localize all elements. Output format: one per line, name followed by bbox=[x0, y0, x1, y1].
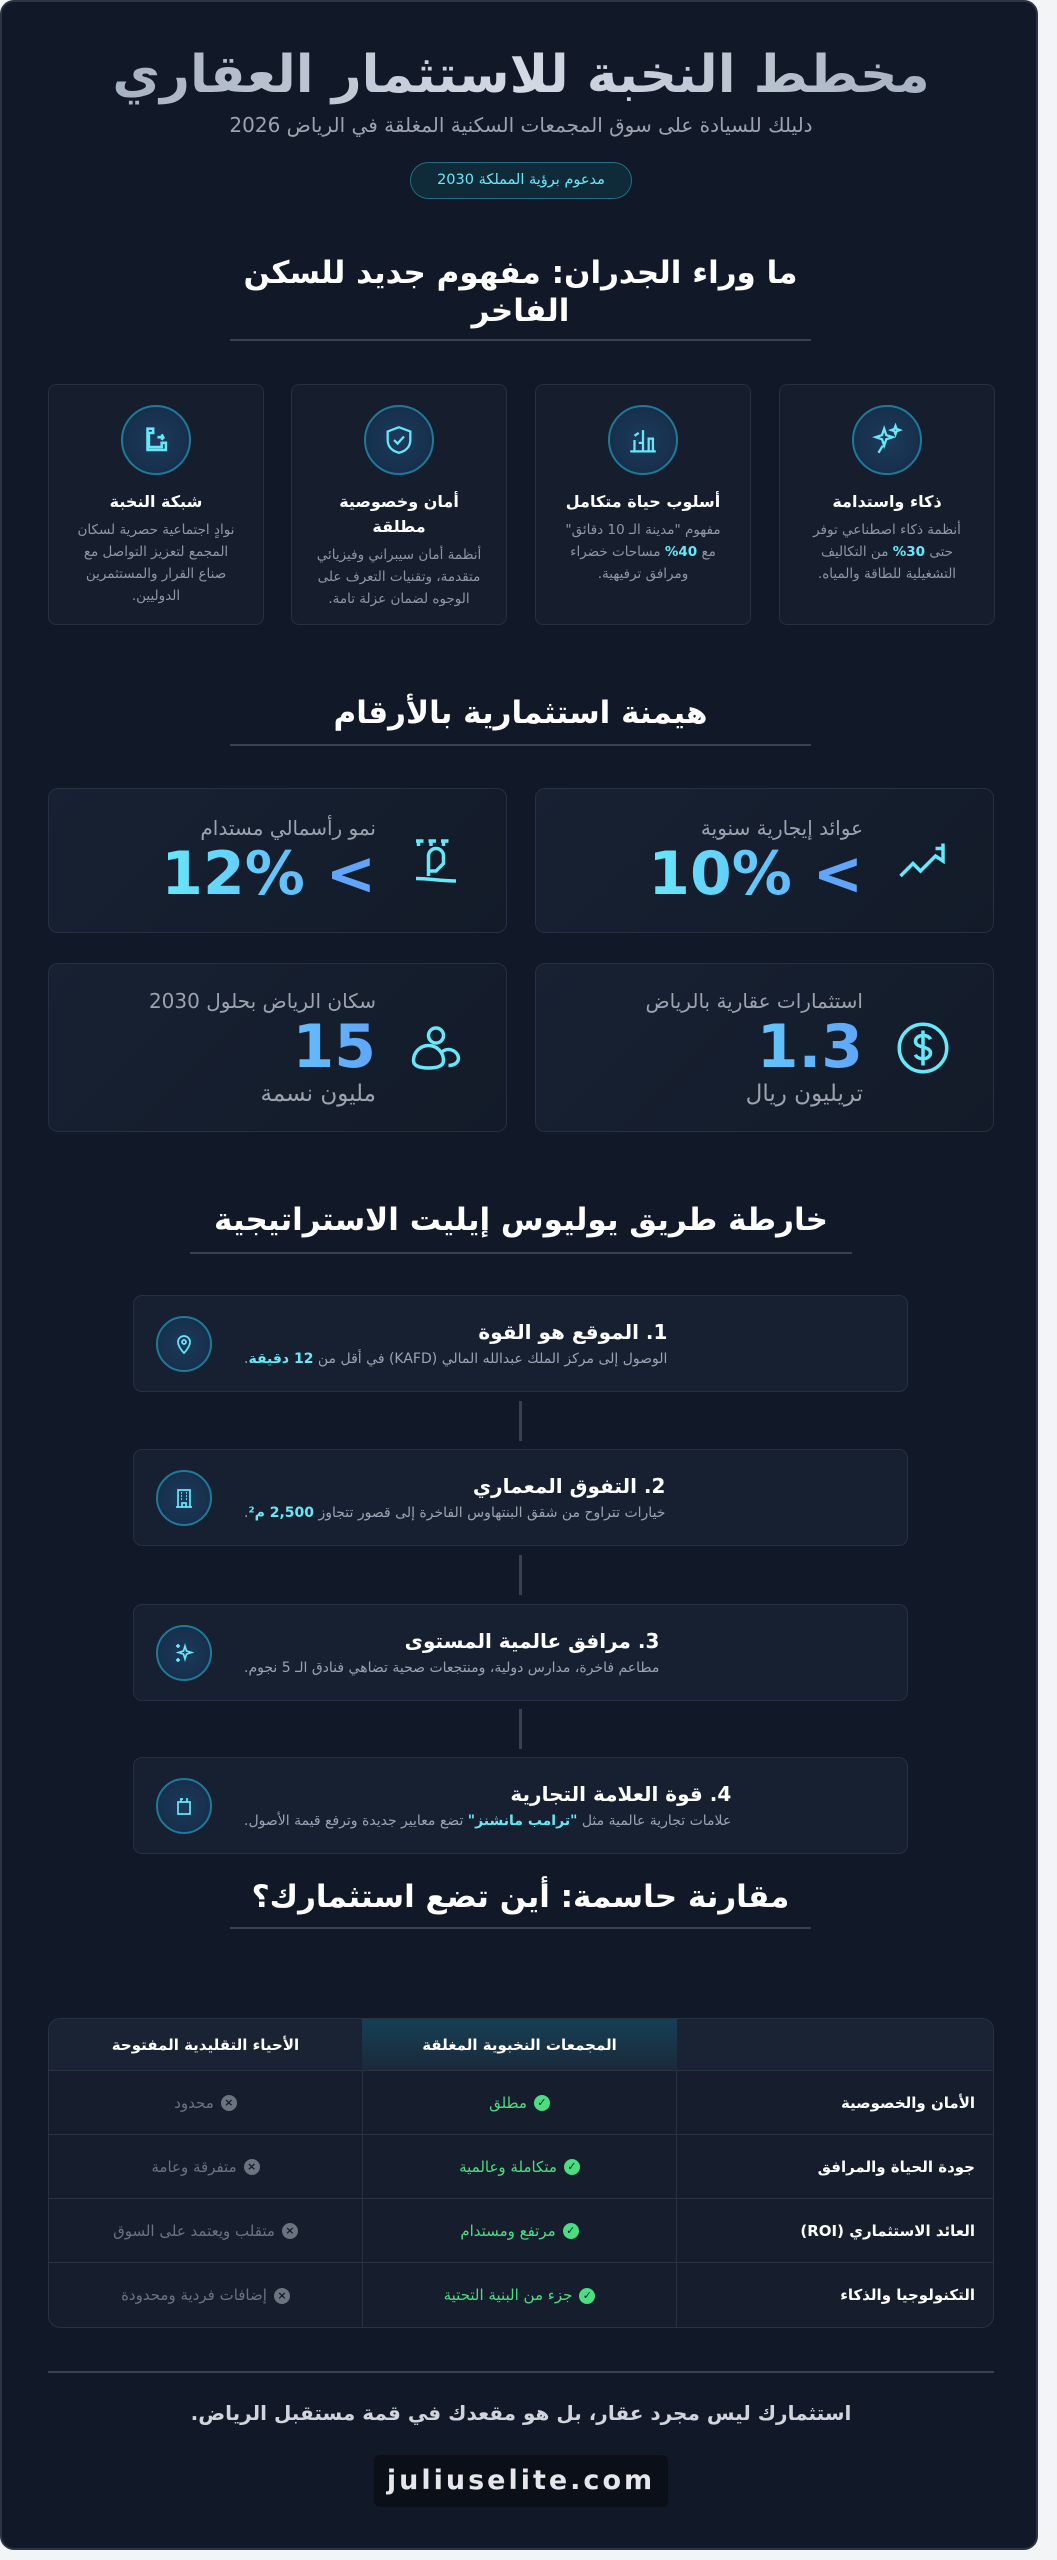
comparison table: × bbox=[277, 2288, 287, 2302]
footer tagline: استثمارك ليس مجرد عقار، بل هو مقعدك في قمة مستقبل الرياض. bbox=[191, 2401, 851, 2425]
comparison table: × bbox=[224, 2096, 233, 2109]
panel: feature network bbox=[48, 384, 264, 625]
comparison table: الأحياء التقليدية المفتوحة bbox=[112, 2036, 299, 2054]
roadmap step 2: خيارات تتراوح من شقق البنتهاوس الفاخرة إلى قصور تتجاوز 2,500 م². bbox=[244, 1504, 665, 1520]
roadmap step 3: مطاعم فاخرة، مدارس دولية، ومنتجعات صحية تضاهي فنادق الـ 5 نجوم. bbox=[244, 1660, 659, 1676]
comparison table: ✓ bbox=[537, 2096, 547, 2109]
badge: vision 2030: مدعوم برؤية المملكة 2030 bbox=[437, 172, 605, 188]
comparison table: الأمان والخصوصية bbox=[841, 2094, 975, 2112]
title: مخطط النخبة للاستثمار العقاري bbox=[112, 45, 930, 105]
comparison table: جزء من البنية التحتية bbox=[444, 2286, 572, 2304]
comparison table: مرتفع ومستدام bbox=[460, 2222, 556, 2240]
stat: capital growth: 12% < bbox=[161, 838, 376, 908]
comparison table: متقلب ويعتمد على السوق bbox=[113, 2222, 275, 2240]
icon: people bbox=[412, 1026, 460, 1070]
stat: rental yields bbox=[535, 788, 994, 933]
roadmap step 1: 1. الموقع هو القوة bbox=[478, 1320, 667, 1344]
stat: rental yields: 10% < bbox=[648, 838, 863, 908]
stat: population: سكان الرياض بحلول 2030 bbox=[149, 988, 376, 1012]
title bbox=[2, 40, 1040, 110]
roadmap step 4: علامات تجارية عالمية مثل "ترامب مانشنز" تضع معايير جديدة وترفع قيمة الأصول. bbox=[244, 1812, 731, 1828]
panel: feature lifestyle bbox=[535, 384, 751, 625]
comparison table: المجمعات النخبوية المغلقة bbox=[422, 2036, 617, 2054]
stat: investments: استثمارات عقارية بالرياض bbox=[645, 988, 863, 1012]
roadmap step 4 bbox=[133, 1757, 908, 1854]
comparison table: متفرقة وعامة bbox=[151, 2158, 237, 2176]
subtitle: دليلك للسيادة على سوق المجمعات السكنية المغلقة في الرياض 2026 bbox=[229, 113, 813, 137]
stat: investments: 1.3 bbox=[757, 1012, 863, 1082]
icon: shopping bag bbox=[156, 1778, 212, 1834]
panel: feature security: مطلقة bbox=[372, 517, 426, 536]
icon: growth plant bbox=[416, 839, 456, 883]
panel: feature security: أنظمة أمان سيبراني وفيزيائي متقدمة، وتقنيات التعرف على الوجوه لضمان عزلة تامة. bbox=[317, 547, 481, 607]
icon: network bbox=[121, 405, 191, 475]
comparison table: التكنولوجيا والذكاء bbox=[840, 2286, 975, 2304]
roadmap step 2: 2. التفوق المعماري bbox=[473, 1474, 665, 1498]
stat: population: 15 bbox=[292, 1012, 376, 1082]
comparison table: محدود bbox=[174, 2094, 214, 2112]
roadmap step 1 bbox=[133, 1295, 908, 1392]
comparison table: مطلق bbox=[489, 2094, 527, 2112]
stat: rental yields: عوائد إيجارية سنوية bbox=[701, 816, 863, 840]
comparison table bbox=[48, 2018, 994, 2328]
roadmap step 2 bbox=[133, 1449, 908, 1546]
panel: feature smart bbox=[779, 384, 995, 625]
icon: city bbox=[608, 405, 678, 475]
comparison table: جودة الحياة والمرافق bbox=[818, 2158, 975, 2176]
icon: sparkles bbox=[852, 405, 922, 475]
panel: feature network: نوادٍ اجتماعية حصرية لسكان المجمع لتعزيز التواصل مع صناع القرار والمستثمرين الدوليين. bbox=[78, 522, 234, 604]
footer website badge: juliuselite.com bbox=[387, 2465, 655, 2496]
comparison table: × bbox=[247, 2160, 256, 2173]
icon: sparkle bbox=[156, 1624, 212, 1680]
stat: capital growth: نمو رأسمالي مستدام bbox=[200, 816, 376, 840]
footer website badge bbox=[374, 2455, 668, 2507]
panel: feature smart: ذكاء واستدامة bbox=[832, 492, 942, 511]
roadmap step 4: 4. قوة العلامة التجارية bbox=[510, 1782, 731, 1806]
icon: dollar bbox=[898, 1022, 948, 1074]
icon: location bbox=[156, 1316, 212, 1372]
comparison table: × bbox=[285, 2224, 295, 2237]
comparison table: متكاملة وعالمية bbox=[459, 2158, 557, 2176]
badge: vision 2030 bbox=[410, 162, 632, 199]
stat: investments bbox=[535, 963, 994, 1132]
heading: roadmap: خارطة طريق يوليوس إيليت الاستراتيجية bbox=[214, 1202, 828, 1238]
roadmap step 3 bbox=[133, 1604, 908, 1701]
heading: beyond walls: ما وراء الجدران: مفهوم جديد للسكن الفاخر bbox=[244, 255, 797, 329]
icon: shield bbox=[364, 405, 434, 475]
comparison table: ✓ bbox=[567, 2160, 577, 2173]
panel: feature security bbox=[291, 384, 507, 625]
panel: feature security: أمان وخصوصية bbox=[339, 492, 459, 511]
stat: population: مليون نسمة bbox=[260, 1080, 376, 1106]
icon: trend bbox=[899, 844, 945, 878]
comparison table: إضافات فردية ومحدودة bbox=[121, 2286, 267, 2304]
stat: investments: تريليون ريال bbox=[746, 1080, 863, 1106]
panel: feature lifestyle: مفهوم "مدينة الـ 10 دقائق" مع 40% مساحات خضراء ومرافق ترفيهية. bbox=[565, 522, 721, 582]
comparison table: ✓ bbox=[583, 2288, 592, 2302]
stat: capital growth bbox=[48, 788, 507, 933]
panel: feature smart: أنظمة ذكاء اصطناعي توفر حتى 30% من التكاليف التشغيلية للطاقة والمياه. bbox=[813, 522, 961, 582]
heading: comparison: مقارنة حاسمة: أين تضع استثمارك؟ bbox=[252, 1879, 789, 1915]
roadmap step 3: 3. مرافق عالمية المستوى bbox=[405, 1628, 659, 1652]
roadmap step 1: الوصول إلى مركز الملك عبدالله المالي (KAFD) في أقل من 12 دقيقة. bbox=[244, 1350, 667, 1366]
panel: feature network: شبكة النخبة bbox=[110, 492, 202, 511]
comparison table: العائد الاستثماري (ROI) bbox=[800, 2222, 975, 2240]
heading: numbers: هيمنة استثمارية بالأرقام bbox=[334, 695, 707, 731]
icon: building bbox=[156, 1470, 212, 1526]
panel: feature lifestyle: أسلوب حياة متكامل bbox=[566, 492, 720, 511]
stat: population bbox=[48, 963, 507, 1132]
comparison table: ✓ bbox=[566, 2224, 575, 2237]
